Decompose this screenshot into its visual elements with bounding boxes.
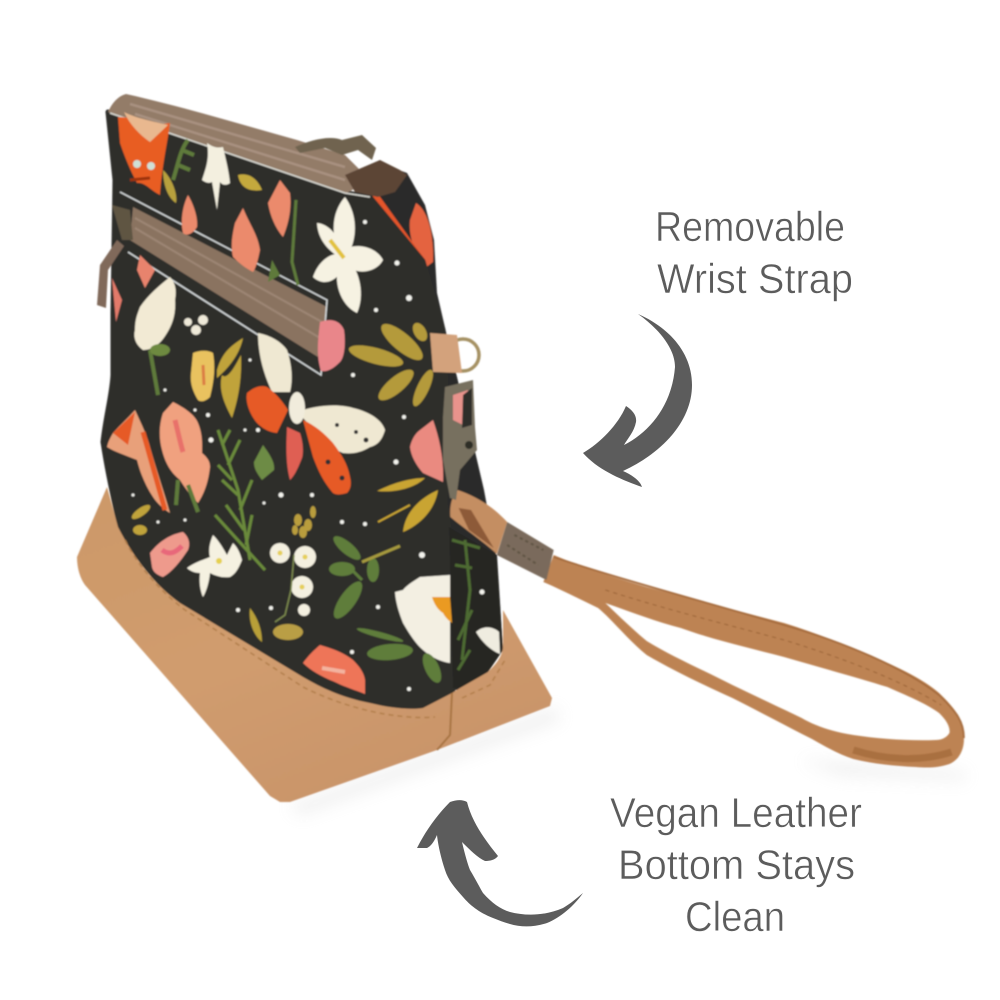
polka dots [132, 220, 484, 691]
flower centres [278, 550, 308, 590]
cropped moth left [107, 410, 170, 513]
green leaf sprig [329, 532, 379, 623]
strap edge shading [554, 557, 964, 738]
white lily bottom [187, 535, 242, 597]
peony tulip [160, 402, 210, 512]
arrow: points to wrist strap [583, 314, 692, 487]
orange seam strip [370, 194, 424, 264]
small white flower [202, 143, 230, 210]
fabric flowers and moths [107, 112, 500, 694]
yellow buds [292, 506, 316, 538]
orange moth top left [118, 112, 170, 195]
side panel greens [452, 540, 480, 670]
pink rose bottom [150, 532, 189, 577]
flower stamen [330, 240, 344, 258]
front pocket zipper [97, 192, 327, 375]
small green leaf [254, 445, 274, 480]
tiny white blossoms [191, 325, 201, 335]
large white flower [313, 197, 383, 313]
text: vegan leather bottom: Clean [685, 893, 785, 940]
yellow sprig left bottom [130, 502, 152, 522]
vegan leather bottom [77, 487, 552, 802]
pink bud [137, 255, 155, 288]
side panel coral flower [410, 203, 433, 268]
moth [247, 333, 385, 494]
olive leaves right [347, 318, 437, 409]
white peony left [134, 277, 176, 350]
pink flower right with yellow leaves [410, 420, 443, 482]
pink tulips [182, 180, 291, 272]
zipper pull [295, 135, 376, 160]
wristlet bag product photo [77, 94, 965, 815]
yellow leaves bottom [250, 608, 262, 642]
yellow leaf [238, 174, 262, 190]
text: vegan leather bottom: Vegan Leather [610, 789, 862, 836]
peony leaves [356, 626, 445, 685]
strap wrap band [497, 522, 554, 580]
clasp and ring [430, 333, 479, 500]
strap lower band shade [853, 750, 951, 759]
text: vegan leather bottom [610, 789, 862, 940]
big white peony [395, 575, 450, 663]
zipper tab [97, 240, 124, 308]
bag front fabric panel [103, 112, 453, 708]
pink rose at pocket [318, 320, 345, 371]
text: removable wrist strap: Wrist Strap [657, 255, 853, 302]
zipper tape mesh [345, 160, 407, 197]
soft shadow [290, 708, 965, 815]
text: removable wrist strap [655, 203, 853, 302]
green sprig [173, 140, 194, 180]
fern [215, 430, 265, 570]
text: vegan leather bottom: Bottom Stays [618, 841, 855, 888]
strap base tab [450, 490, 507, 554]
metal ring [447, 339, 479, 371]
text: removable wrist strap: Removable [655, 203, 845, 250]
coral rose [303, 645, 365, 694]
side panel [370, 165, 503, 690]
side panel lower [449, 527, 503, 688]
swivel clasp [443, 380, 477, 500]
arrow: points to leather bottom [417, 800, 583, 926]
leather tab [430, 333, 462, 373]
top zipper [108, 94, 407, 197]
strap loop [543, 555, 964, 768]
side panel flower [476, 627, 500, 654]
small white flowers [270, 543, 316, 616]
wrist strap [450, 490, 964, 768]
yellow flower [191, 351, 214, 401]
strap stitching [605, 590, 941, 705]
yellow leaf sprig left [217, 338, 243, 418]
